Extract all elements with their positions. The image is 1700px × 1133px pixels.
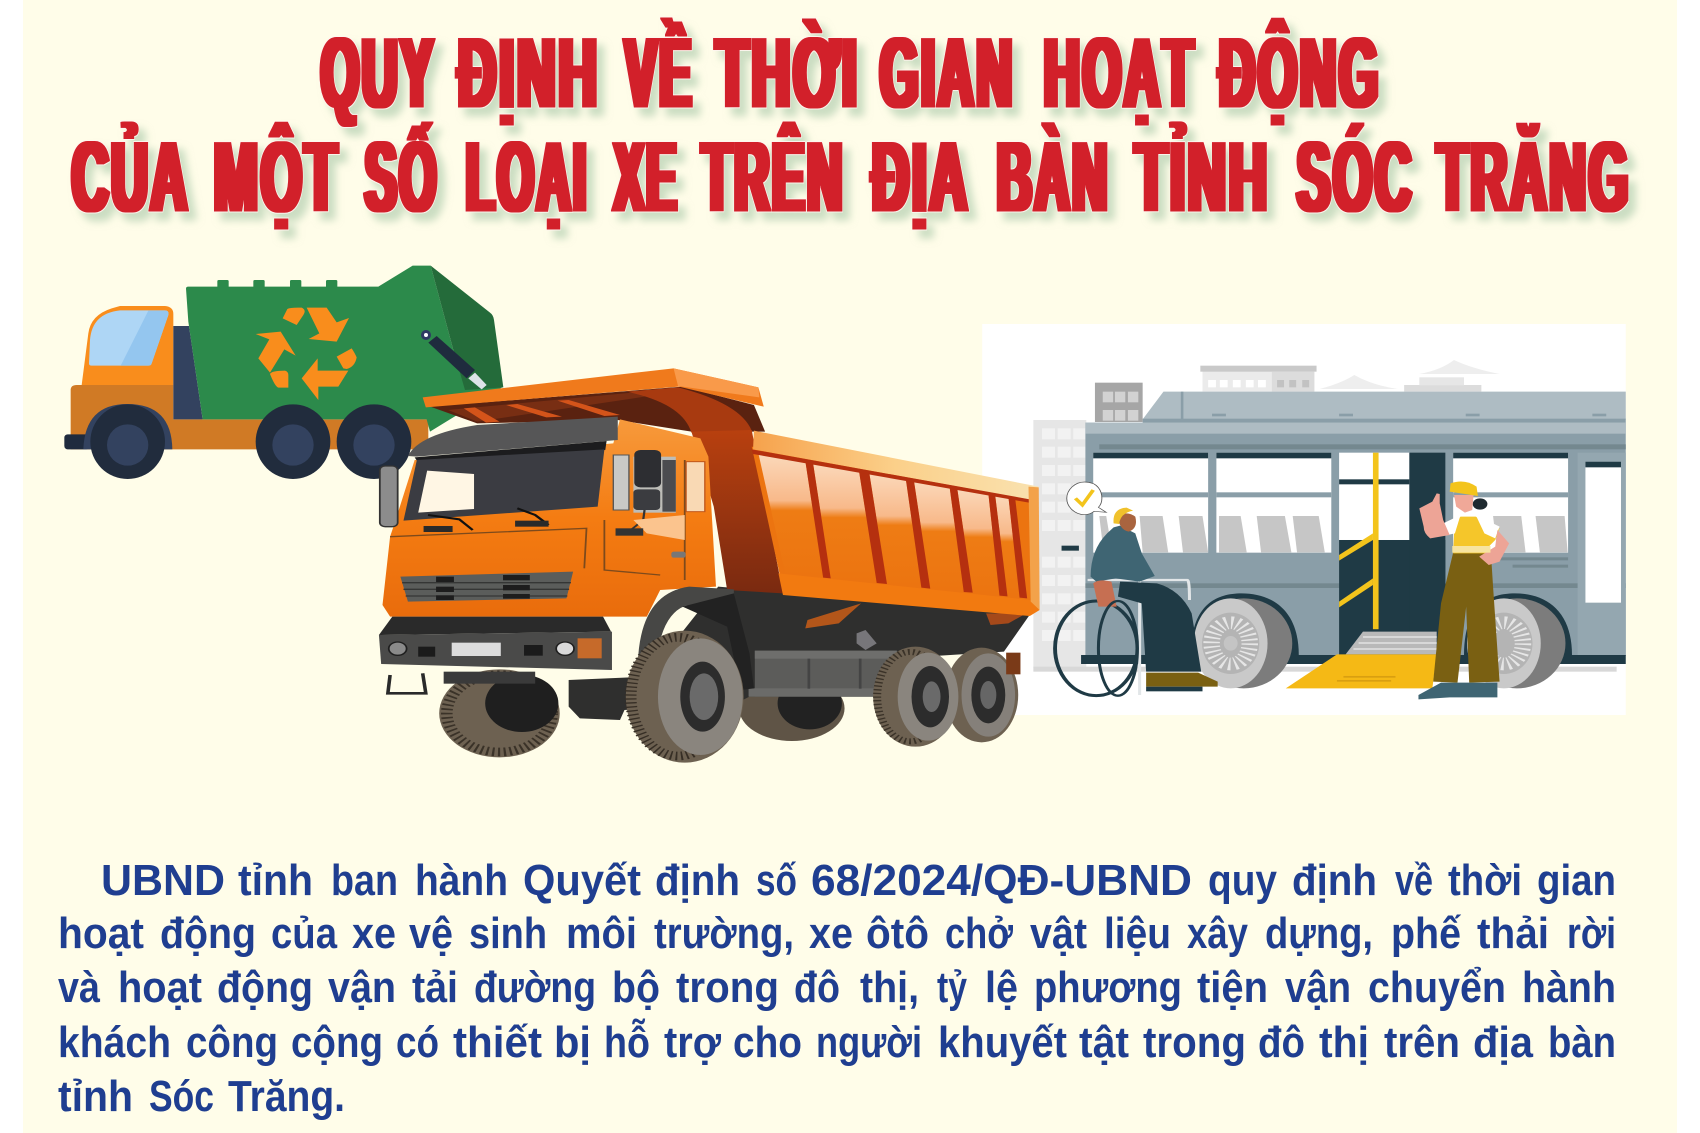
rear mudguard — [1006, 653, 1020, 674]
body line 1: Quyết — [523, 856, 641, 905]
sleeves — [1443, 515, 1500, 538]
wipers — [428, 508, 549, 530]
visor shadow — [415, 441, 607, 461]
body line 1: định — [655, 856, 740, 905]
beanie — [1113, 508, 1133, 524]
rear bumper — [64, 434, 89, 449]
title line 1: QUY — [321, 17, 436, 128]
title line 1 — [321, 17, 1381, 128]
bus roof — [1143, 392, 1626, 419]
body line 2: rời — [1567, 909, 1616, 958]
body line 1: quy — [1208, 856, 1277, 905]
body line 4: trong — [1143, 1018, 1246, 1067]
illustration: garbage truck — [64, 266, 503, 479]
body line 4: khuyết — [938, 1018, 1067, 1067]
title line 2: MỘT — [214, 121, 340, 232]
body line 4: thị — [1319, 1018, 1369, 1067]
body line 1: ban — [331, 856, 398, 905]
cab connector — [173, 326, 203, 419]
cap — [1450, 481, 1478, 496]
bus upper band — [1085, 423, 1626, 434]
body line 2: phế — [1391, 909, 1461, 958]
body line 4: hỗ — [604, 1017, 650, 1067]
face — [1454, 495, 1474, 513]
trousers — [1433, 553, 1500, 683]
trousers — [1118, 582, 1201, 672]
title line 2: BÀN — [997, 121, 1110, 232]
white panel — [982, 324, 1626, 715]
wheelchair front ring — [1098, 601, 1137, 696]
speech bubble with check — [1067, 482, 1106, 515]
bus seats — [1099, 516, 1568, 552]
body line 3: hoạt — [118, 963, 202, 1012]
body line 2: vệ — [409, 909, 453, 958]
left mirror — [380, 466, 398, 527]
body line 3: lệ — [985, 963, 1018, 1012]
body line 4: thiết — [453, 1018, 542, 1067]
body line 3: đô — [794, 963, 840, 1012]
step and tow hook — [388, 672, 535, 693]
title line 1: HOẠT — [1044, 17, 1196, 128]
body line 3 — [58, 963, 1616, 1012]
windshield — [89, 310, 169, 366]
truck chassis — [71, 385, 428, 449]
box panels — [758, 453, 1020, 598]
title line 1: ĐỘNG — [1219, 17, 1381, 128]
wheelchair rear wheel — [1055, 601, 1137, 696]
chassis bracket — [857, 630, 877, 650]
uniform top — [1443, 517, 1500, 553]
body line 1: về — [1395, 856, 1433, 905]
body line 4: tật — [1079, 1018, 1129, 1067]
body line 4: trợ — [664, 1018, 722, 1067]
body line 1: hành — [415, 856, 508, 905]
cab visor — [408, 417, 618, 457]
bus door — [1339, 453, 1445, 655]
title line 2: LOẠI — [466, 121, 589, 232]
body line 2: dựng, — [1265, 909, 1373, 958]
front main wheel — [626, 631, 744, 763]
left front wheel — [439, 669, 560, 757]
body line 2: môi — [566, 909, 637, 958]
bus stripes — [1085, 444, 1626, 588]
illustration: accessible bus panel — [982, 324, 1626, 715]
hydraulic piston — [421, 330, 487, 389]
body line 4: có — [396, 1018, 439, 1067]
canopy curve — [627, 387, 752, 433]
grille — [400, 572, 573, 602]
body line 5: Sóc — [149, 1072, 214, 1121]
body line 3: trong — [676, 963, 779, 1012]
body line 4: bị — [554, 1018, 591, 1067]
body line 2: xe — [352, 909, 396, 958]
title line 2: TRÊN — [702, 121, 845, 232]
title line 2: XE — [614, 121, 679, 232]
bus windows — [1093, 453, 1568, 553]
title line 2: TỈNH — [1135, 121, 1270, 232]
wheel 2 — [1464, 593, 1572, 688]
canopy underside — [430, 387, 765, 432]
shoes — [1146, 673, 1218, 687]
icon: recycling symbol — [256, 308, 357, 400]
background tower — [1033, 420, 1086, 668]
body line 1: số — [756, 856, 797, 905]
body line 2: xây — [1187, 909, 1248, 958]
title line 1: THỜI — [716, 17, 860, 128]
rear door — [1578, 453, 1626, 656]
rear tyres — [873, 647, 1018, 747]
box lower rail — [778, 573, 1040, 616]
canopy highlight — [674, 368, 759, 397]
body line 4 — [58, 1017, 1616, 1067]
title line 1: ĐỊNH — [458, 17, 600, 128]
box top lip — [753, 431, 1039, 500]
body line 3: động — [217, 963, 313, 1012]
body line 2: xe — [809, 909, 853, 958]
body line 4: công — [186, 1018, 278, 1067]
chassis — [569, 587, 1031, 720]
bus side vents — [1495, 557, 1568, 568]
body line 1: thời — [1448, 856, 1522, 905]
bus skirt and kerb — [1033, 655, 1626, 672]
windshield reflection — [418, 471, 474, 513]
shoes — [1418, 683, 1497, 699]
body line 2: vật — [1030, 909, 1087, 958]
hand and arm — [1093, 580, 1117, 607]
footrest — [1146, 687, 1202, 691]
body line 4: đô — [1258, 1018, 1305, 1067]
cab fender — [638, 587, 734, 675]
body line 5: tỉnh — [58, 1072, 133, 1121]
title line 2: CỦA — [72, 121, 190, 232]
bus attendant — [1418, 481, 1509, 699]
title line 1: GIAN — [880, 17, 1015, 128]
rear far wheel — [739, 676, 845, 741]
door highlight — [633, 515, 685, 540]
windshield shade — [121, 311, 169, 366]
box end post — [1028, 487, 1040, 610]
body line 2 — [58, 909, 1616, 958]
body line 2: động — [160, 909, 256, 958]
under cab — [379, 617, 611, 635]
side window — [613, 450, 705, 533]
title line 2: SÓC — [1297, 121, 1414, 232]
title line 2: ĐỊA — [872, 121, 970, 232]
body line 1: 68/2024/QĐ-UBND — [811, 856, 1192, 905]
body line 5: Trăng. — [228, 1072, 345, 1121]
bus body — [1085, 423, 1626, 656]
body line 2: chở — [945, 909, 1014, 958]
box ribs — [752, 449, 1030, 598]
body line 3: vận — [328, 963, 396, 1012]
body line 1: tỉnh — [238, 856, 313, 905]
title line 1: VỀ — [625, 17, 694, 128]
canopy top plate — [423, 368, 764, 407]
body line 1: gian — [1537, 856, 1616, 905]
rear wheels — [256, 404, 411, 479]
body line 4: khách — [58, 1018, 171, 1067]
person in wheelchair — [1055, 508, 1218, 696]
body line 3: và — [58, 963, 100, 1012]
title line 2 — [72, 121, 1631, 232]
bumper — [379, 632, 612, 670]
body line 1: UBND — [101, 856, 225, 905]
body line 1 — [101, 856, 1616, 905]
hood latches — [424, 521, 549, 532]
body paragraph — [58, 856, 1616, 1121]
body line 4: trên — [1384, 1018, 1460, 1067]
body line 2: trường, — [654, 909, 794, 958]
front wheel — [83, 404, 172, 479]
body line 4: cho — [733, 1018, 802, 1067]
boarding ramp — [1286, 632, 1437, 688]
wheel 1 — [1191, 593, 1299, 688]
body line 4: người — [816, 1018, 922, 1067]
wheelchair frame — [1088, 580, 1189, 695]
illustration: orange dump truck — [379, 368, 1040, 763]
headboard front — [691, 430, 783, 593]
body line 3: bộ — [612, 963, 660, 1012]
head — [1118, 513, 1136, 532]
body line 4: địa — [1473, 1018, 1533, 1067]
body line 3: phương — [1034, 963, 1182, 1012]
front panel seam — [390, 460, 685, 580]
canopy ribs — [448, 392, 645, 423]
bus roof detail — [1143, 392, 1626, 423]
body line 2: sinh — [469, 909, 547, 958]
top tabs — [217, 280, 337, 288]
door handle — [616, 528, 643, 536]
arm on hip — [1479, 530, 1509, 565]
dump box — [752, 447, 1032, 602]
body line 3: tải — [412, 963, 458, 1012]
title line 2: SỐ — [365, 121, 439, 232]
body line 2: ôtô — [866, 909, 929, 958]
body line 2: thải — [1477, 909, 1549, 958]
raised arm and thumb — [1419, 493, 1450, 538]
body line 3: chuyển — [1368, 963, 1506, 1012]
body line 2: hoạt — [58, 909, 144, 958]
body rear panel — [431, 266, 503, 390]
body line 2: liệu — [1104, 909, 1171, 958]
windshield — [403, 449, 604, 521]
body line 5 — [58, 1072, 345, 1121]
background city — [1095, 360, 1500, 422]
body line 3: tỷ — [937, 963, 967, 1012]
side box — [749, 651, 898, 697]
body line 3: thị, — [860, 963, 919, 1012]
body line 3: tiện — [1197, 963, 1268, 1012]
garbage body — [186, 266, 503, 432]
hair bun — [1473, 498, 1487, 510]
hoodie — [1091, 526, 1155, 582]
body line 4: bàn — [1548, 1018, 1616, 1067]
cab body — [383, 419, 716, 617]
body line 2: của — [271, 909, 337, 958]
mudguard strut — [683, 593, 754, 690]
chassis orange details — [805, 603, 861, 628]
body line 3: vận — [1285, 963, 1351, 1012]
cab — [82, 306, 173, 385]
body line 3: hành — [1522, 963, 1616, 1012]
waist band — [1452, 546, 1490, 553]
body line 3: đường — [474, 963, 596, 1012]
body line 4: cộng — [291, 1018, 383, 1067]
body line 1: định — [1292, 856, 1377, 905]
title — [72, 17, 1631, 232]
